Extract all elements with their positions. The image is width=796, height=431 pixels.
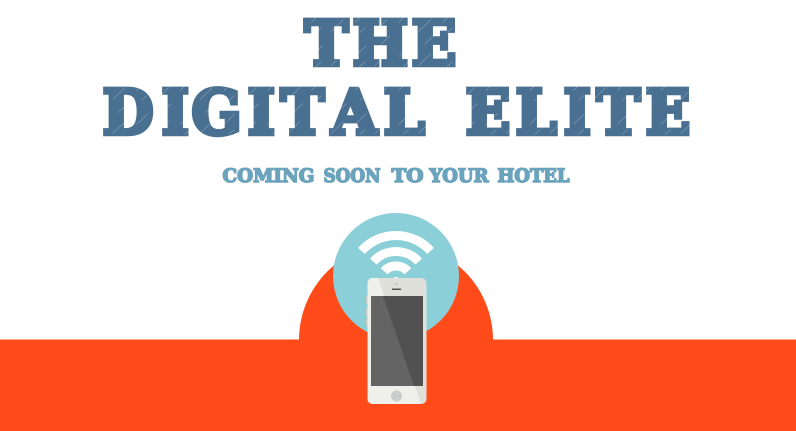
title line: THE: THE [305, 8, 456, 80]
phone home button [391, 390, 402, 402]
subtitle: SOON [324, 166, 381, 187]
orange banner with semicircle [0, 243, 796, 431]
icon: smartphone [366, 278, 426, 404]
title [103, 8, 690, 149]
subtitle: COMING [222, 166, 314, 187]
icon: wifi signal [361, 235, 431, 287]
phone screen glare [371, 296, 414, 386]
subtitle: YOUR [429, 166, 489, 187]
phone camera [396, 283, 397, 285]
phone body [368, 278, 426, 404]
phone speaker [392, 288, 401, 290]
subtitle [222, 166, 570, 187]
phone screen [371, 296, 423, 386]
subtitle: TO [392, 166, 424, 187]
subtitle: HOTEL [498, 166, 570, 187]
title line: DIGITAL ELITE: DIGITAL ELITE [103, 77, 690, 149]
icon: teal circle [333, 213, 459, 339]
phone body highlight [368, 278, 421, 404]
phone side buttons [366, 296, 368, 326]
